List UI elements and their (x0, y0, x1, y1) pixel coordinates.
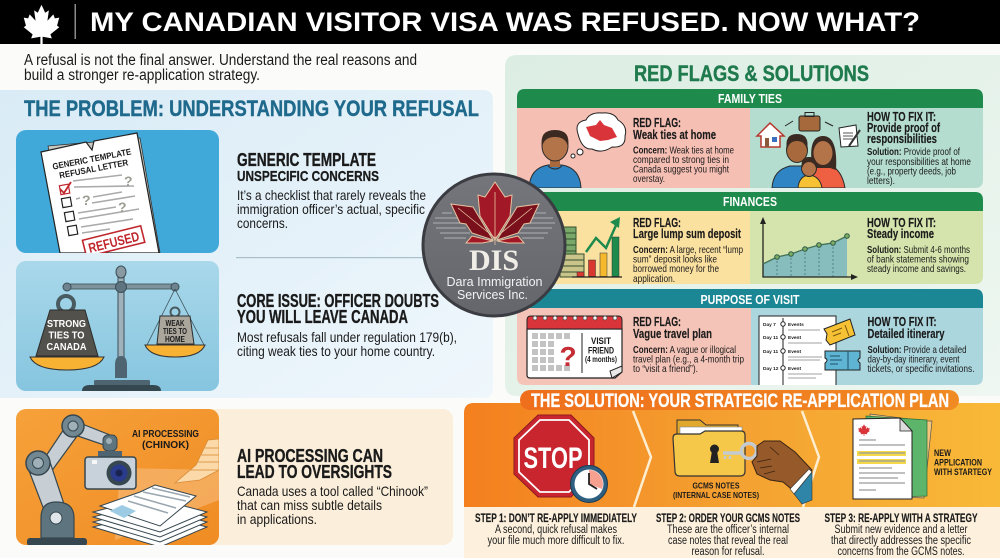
text: step 1: your file much more difficult to fix. (488, 535, 624, 547)
panel: ai processing (16, 409, 453, 547)
text: itinerary fix: day-by-day itinerary, event (868, 354, 960, 366)
text block: ai processing: in applications. (237, 511, 317, 527)
text: family ties fix (867, 110, 971, 187)
icon: new application documents: NEW (934, 448, 952, 458)
text: family ties fix: letters). (867, 175, 895, 187)
text: lump sum red flag: borrowed money for the (633, 263, 719, 275)
text: lump sum red flag: Concern: A large, recent “lump (633, 244, 743, 256)
text: family ties fix: HOW TO FIX IT: (867, 110, 936, 124)
text block: ai processing: AI PROCESSING CAN (237, 446, 383, 466)
icon: itinerary and tickets (759, 316, 860, 391)
text: itinerary fix: Detailed itinerary (868, 327, 945, 341)
text block: core issue: CORE ISSUE: OFFICER DOUBTS (237, 291, 439, 311)
icon: itinerary and tickets: Day 11 (763, 349, 779, 355)
icon: family with house, briefcase and document (757, 112, 860, 188)
text: vague plan red flag: Concern: A vague or illogical (633, 344, 736, 356)
text block: core issue: Most refusals fall under regulation 179(b), (237, 329, 457, 345)
text: steady income fix: steady income and savings. (867, 263, 966, 275)
text: step 1: A second, quick refusal makes (495, 524, 617, 536)
row: purpose of visit (517, 289, 983, 391)
logo: Dara Immigration Services: Services Inc. (457, 288, 528, 302)
text: step 3: Submit new evidence and a letter (834, 524, 968, 536)
text block: generic template: concerns. (237, 215, 288, 231)
text: step 2: These are the officer’s internal (667, 524, 789, 536)
card: scale illustration (16, 261, 219, 391)
text: step 3 (824, 513, 978, 558)
text: step 1: STEP 1: DON’T RE-APPLY IMMEDIATELY (475, 513, 637, 525)
card: refusal letter illustration: ? (124, 173, 133, 189)
row: finances (517, 192, 983, 285)
text: lump sum red flag: sum” deposit looks like (633, 254, 717, 266)
card: robot arm illustration (16, 409, 219, 547)
text: steady income fix (867, 216, 970, 275)
text: weak ties red flag: Weak ties at home (633, 128, 716, 142)
text: family ties fix: your responsibilities at home (867, 156, 971, 168)
icon: person thinking of canada (529, 113, 626, 188)
label: ai processing: (CHINOK) (142, 440, 189, 451)
text: lump sum red flag: Large lump sum deposit (633, 227, 742, 241)
icon: itinerary and tickets: Events (788, 322, 804, 328)
text: step 1 (475, 513, 637, 547)
text: itinerary fix (868, 315, 974, 375)
icon: itinerary and tickets: Event (788, 335, 801, 341)
card: refusal letter illustration (16, 130, 219, 257)
card: scale illustration: WEAK (166, 319, 185, 328)
label: ai processing: AI PROCESSING (132, 429, 199, 440)
text block: generic template: UNSPECIFIC CONCERNS (237, 168, 379, 185)
text: vague plan red flag (633, 315, 744, 375)
text: steady income fix: HOW TO FIX IT: (867, 216, 936, 230)
subtitle (24, 52, 417, 84)
text: family ties fix: responsibilities (867, 132, 937, 146)
row: family ties: FAMILY TIES (718, 91, 782, 106)
text: vague plan red flag: travel plan (e.g., a 4-month trip (633, 354, 744, 366)
text: step 3: concerns from the GCMS notes. (838, 546, 964, 558)
text: lump sum red flag (633, 216, 743, 285)
text: weak ties red flag: Canada suggest you might (633, 164, 729, 176)
icon: folder with key and hand: GCMS NOTES (692, 480, 740, 490)
text: weak ties red flag: overstay. (633, 173, 665, 185)
text block: generic template (237, 150, 426, 231)
heading: red flags: RED FLAGS & SOLUTIONS (634, 61, 869, 86)
text block: generic template: GENERIC TEMPLATE (237, 150, 376, 170)
text: steady income fix: Solution: Submit 4-6 months (867, 244, 970, 256)
text block: core issue: YOU WILL LEAVE CANADA (237, 307, 408, 327)
icon: money and rising bars (560, 217, 622, 277)
text: step 2: case notes that reveal the real (668, 535, 788, 547)
icon: maple leaf (24, 5, 59, 44)
text block: ai processing: that can miss subtle details (237, 497, 382, 513)
text: itinerary fix: HOW TO FIX IT: (868, 315, 936, 329)
header bar (0, 0, 1000, 44)
card: scale illustration: STRONG (47, 318, 86, 330)
text block: generic template: immigration officer’s actual, specific (237, 201, 425, 217)
text: weak ties red flag: RED FLAG: (633, 116, 681, 130)
text: step 2: STEP 2: ORDER YOUR GCMS NOTES (656, 513, 800, 525)
icon: stop sign with clock (514, 415, 608, 502)
icon: calendar (527, 316, 622, 378)
icon: itinerary and tickets: Day 7 (763, 322, 776, 328)
text: vague plan red flag: Vague travel plan (633, 327, 712, 341)
heading: the problem: THE PROBLEM: UNDERSTANDING YOUR REFUSAL (24, 96, 479, 121)
panel: red flags and solutions (505, 55, 1000, 396)
text block: generic template: It’s a checklist that rarely reveals the (237, 187, 426, 203)
text: weak ties red flag (633, 116, 734, 185)
text: step 2: reason for refusal. (692, 546, 764, 558)
text block: core issue: citing weak ties to your home country. (237, 343, 435, 359)
logo: Dara Immigration Services: DIS (469, 244, 519, 277)
text: family ties fix: Solution: Provide proof of (867, 146, 960, 158)
text: lump sum red flag: application. (633, 273, 675, 285)
panel: the problem (0, 90, 493, 398)
title: MY CANADIAN VISITOR VISA WAS REFUSED. NOW WHAT? (90, 7, 920, 37)
subtitle: build a stronger re-application strategy. (24, 67, 260, 84)
text: weak ties red flag: compared to strong ties in (633, 154, 729, 166)
text block: ai processing: Canada uses a tool called “Chinook” (237, 483, 428, 499)
row: finances: FINANCES (723, 194, 777, 209)
card: scale illustration: HOME (165, 335, 185, 344)
row: purpose of visit: PURPOSE OF VISIT (700, 292, 800, 307)
text: vague plan red flag: RED FLAG: (633, 315, 681, 329)
text: lump sum red flag: RED FLAG: (633, 216, 681, 230)
icon: new application documents: APPLICATION (934, 458, 982, 468)
text: weak ties red flag: Concern: Weak ties at home (633, 144, 734, 156)
text: steady income fix: Steady income (867, 227, 934, 241)
card: scale illustration: TIES TO (48, 330, 84, 342)
icon: calendar: FRIEND (588, 346, 614, 356)
logo: Dara Immigration Services: Dara Immigration (446, 275, 543, 289)
card: refusal letter illustration: ? (82, 192, 91, 208)
card: scale illustration: TIES TO (163, 327, 187, 336)
icon: new application documents (853, 414, 992, 499)
subtitle: A refusal is not the final answer. Understand the real reasons and (24, 52, 417, 69)
text: family ties fix: (e.g., property deeds, job (867, 166, 956, 178)
icon: itinerary and tickets: Event (788, 349, 801, 355)
icon: calendar: VISIT (591, 336, 611, 347)
icon: folder with key and hand: (INTERNAL CASE NOTES) (673, 490, 759, 500)
icon: stop sign with clock: STOP (524, 442, 582, 475)
icon: calendar: ? (559, 341, 577, 372)
card: refusal letter illustration: ? (118, 199, 127, 215)
icon: itinerary and tickets: Event (788, 366, 801, 372)
logo: Dara Immigration Services (423, 174, 565, 316)
card: refusal letter illustration: GENERIC TEMPLATE (52, 146, 132, 172)
panel: the solution (464, 390, 1000, 558)
row: family ties (517, 89, 983, 188)
icon: folder with key and hand (673, 420, 812, 504)
text: vague plan red flag: to “visit a friend”). (633, 363, 698, 375)
label: ai processing (132, 430, 198, 450)
text: itinerary fix: tickets, or specific invitations. (868, 363, 974, 375)
icon: itinerary and tickets: Day 12 (763, 366, 779, 372)
card: scale illustration: CANADA (46, 341, 87, 353)
text: itinerary fix: Solution: Provide a detailed (868, 344, 967, 356)
chart: steady income line (760, 217, 858, 280)
text: step 2 (656, 513, 800, 558)
text block: core issue (237, 291, 457, 359)
card: refusal letter illustration: REFUSED (87, 229, 141, 256)
text block: ai processing (237, 446, 428, 527)
text: family ties fix: Provide proof of (867, 121, 941, 135)
text block: ai processing: LEAD TO OVERSIGHTS (237, 462, 392, 482)
icon: calendar: (4 months) (585, 355, 617, 364)
card: refusal letter illustration: REFUSAL LETTER (58, 157, 130, 180)
icon: itinerary and tickets: Day 11 (763, 335, 779, 341)
text: steady income fix: of bank statements showing (867, 254, 969, 266)
